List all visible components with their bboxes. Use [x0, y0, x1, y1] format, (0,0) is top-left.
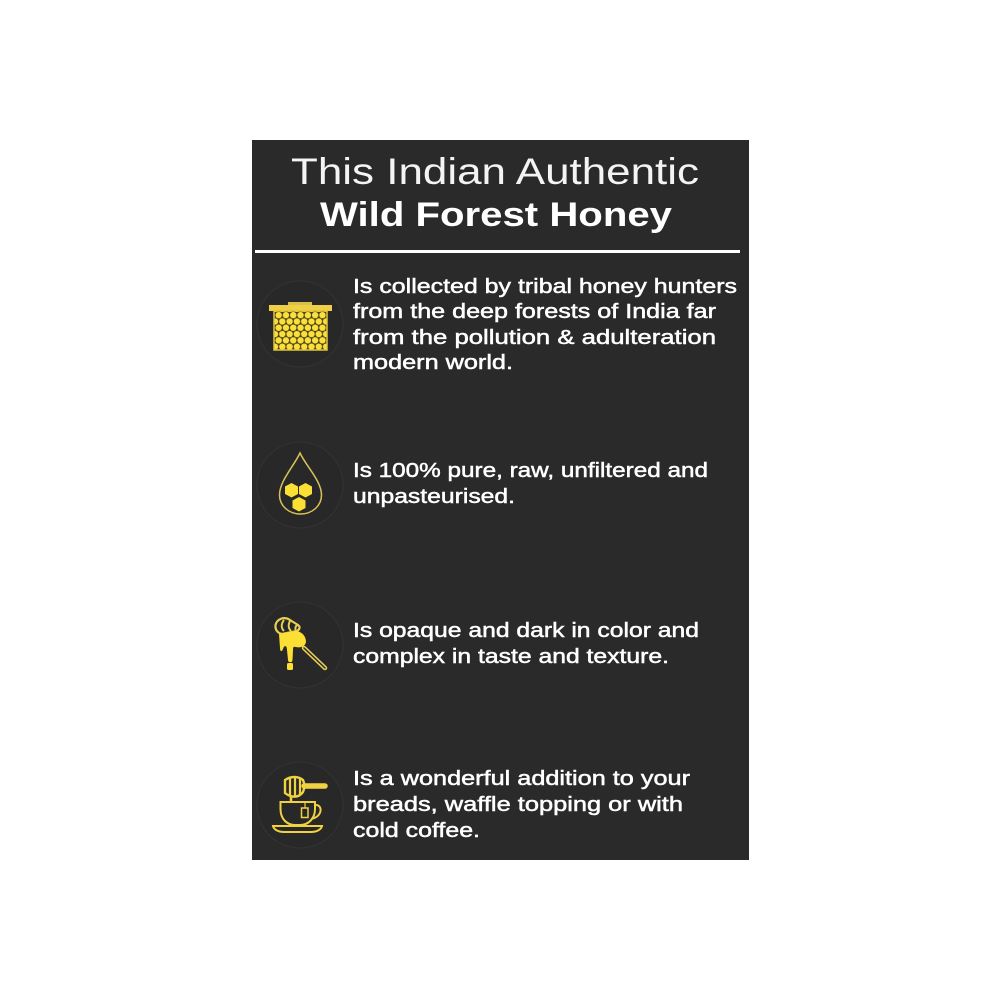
text block: opaque and dark: Is opaque and dark in color and [353, 619, 699, 642]
text block: wonderful addition: Is a wonderful addition to your [353, 767, 690, 790]
text block: pure and raw: Is 100% pure, raw, unfiltered and [353, 459, 708, 482]
text block: tribal honey hunters: from the pollution & adulteration [353, 326, 716, 349]
icon: honey drop [257, 442, 343, 528]
icon: honey dipper [257, 602, 343, 688]
text block: tribal honey hunters [353, 275, 737, 374]
text block: wonderful addition: cold coffee. [353, 819, 480, 842]
icon: honeycomb frame [257, 281, 343, 367]
icon: tea cup with dipper [257, 762, 343, 848]
title: Wild Forest Honey [320, 196, 672, 234]
text block: tribal honey hunters: from the deep forests of India far [353, 300, 716, 323]
text block: tribal honey hunters: modern world. [353, 351, 513, 374]
text block: tribal honey hunters: Is collected by tribal honey hunters [353, 275, 737, 298]
text block: opaque and dark [353, 619, 699, 668]
text block: pure and raw: unpasteurised. [353, 485, 515, 508]
text block: pure and raw [353, 459, 708, 508]
text block: wonderful addition [353, 767, 690, 842]
title [291, 151, 699, 234]
text block: opaque and dark: complex in taste and texture. [353, 645, 669, 668]
title: This Indian Authentic [291, 151, 699, 192]
text block: wonderful addition: breads, waffle topping or with [353, 793, 683, 816]
panel: dark background [252, 140, 749, 860]
